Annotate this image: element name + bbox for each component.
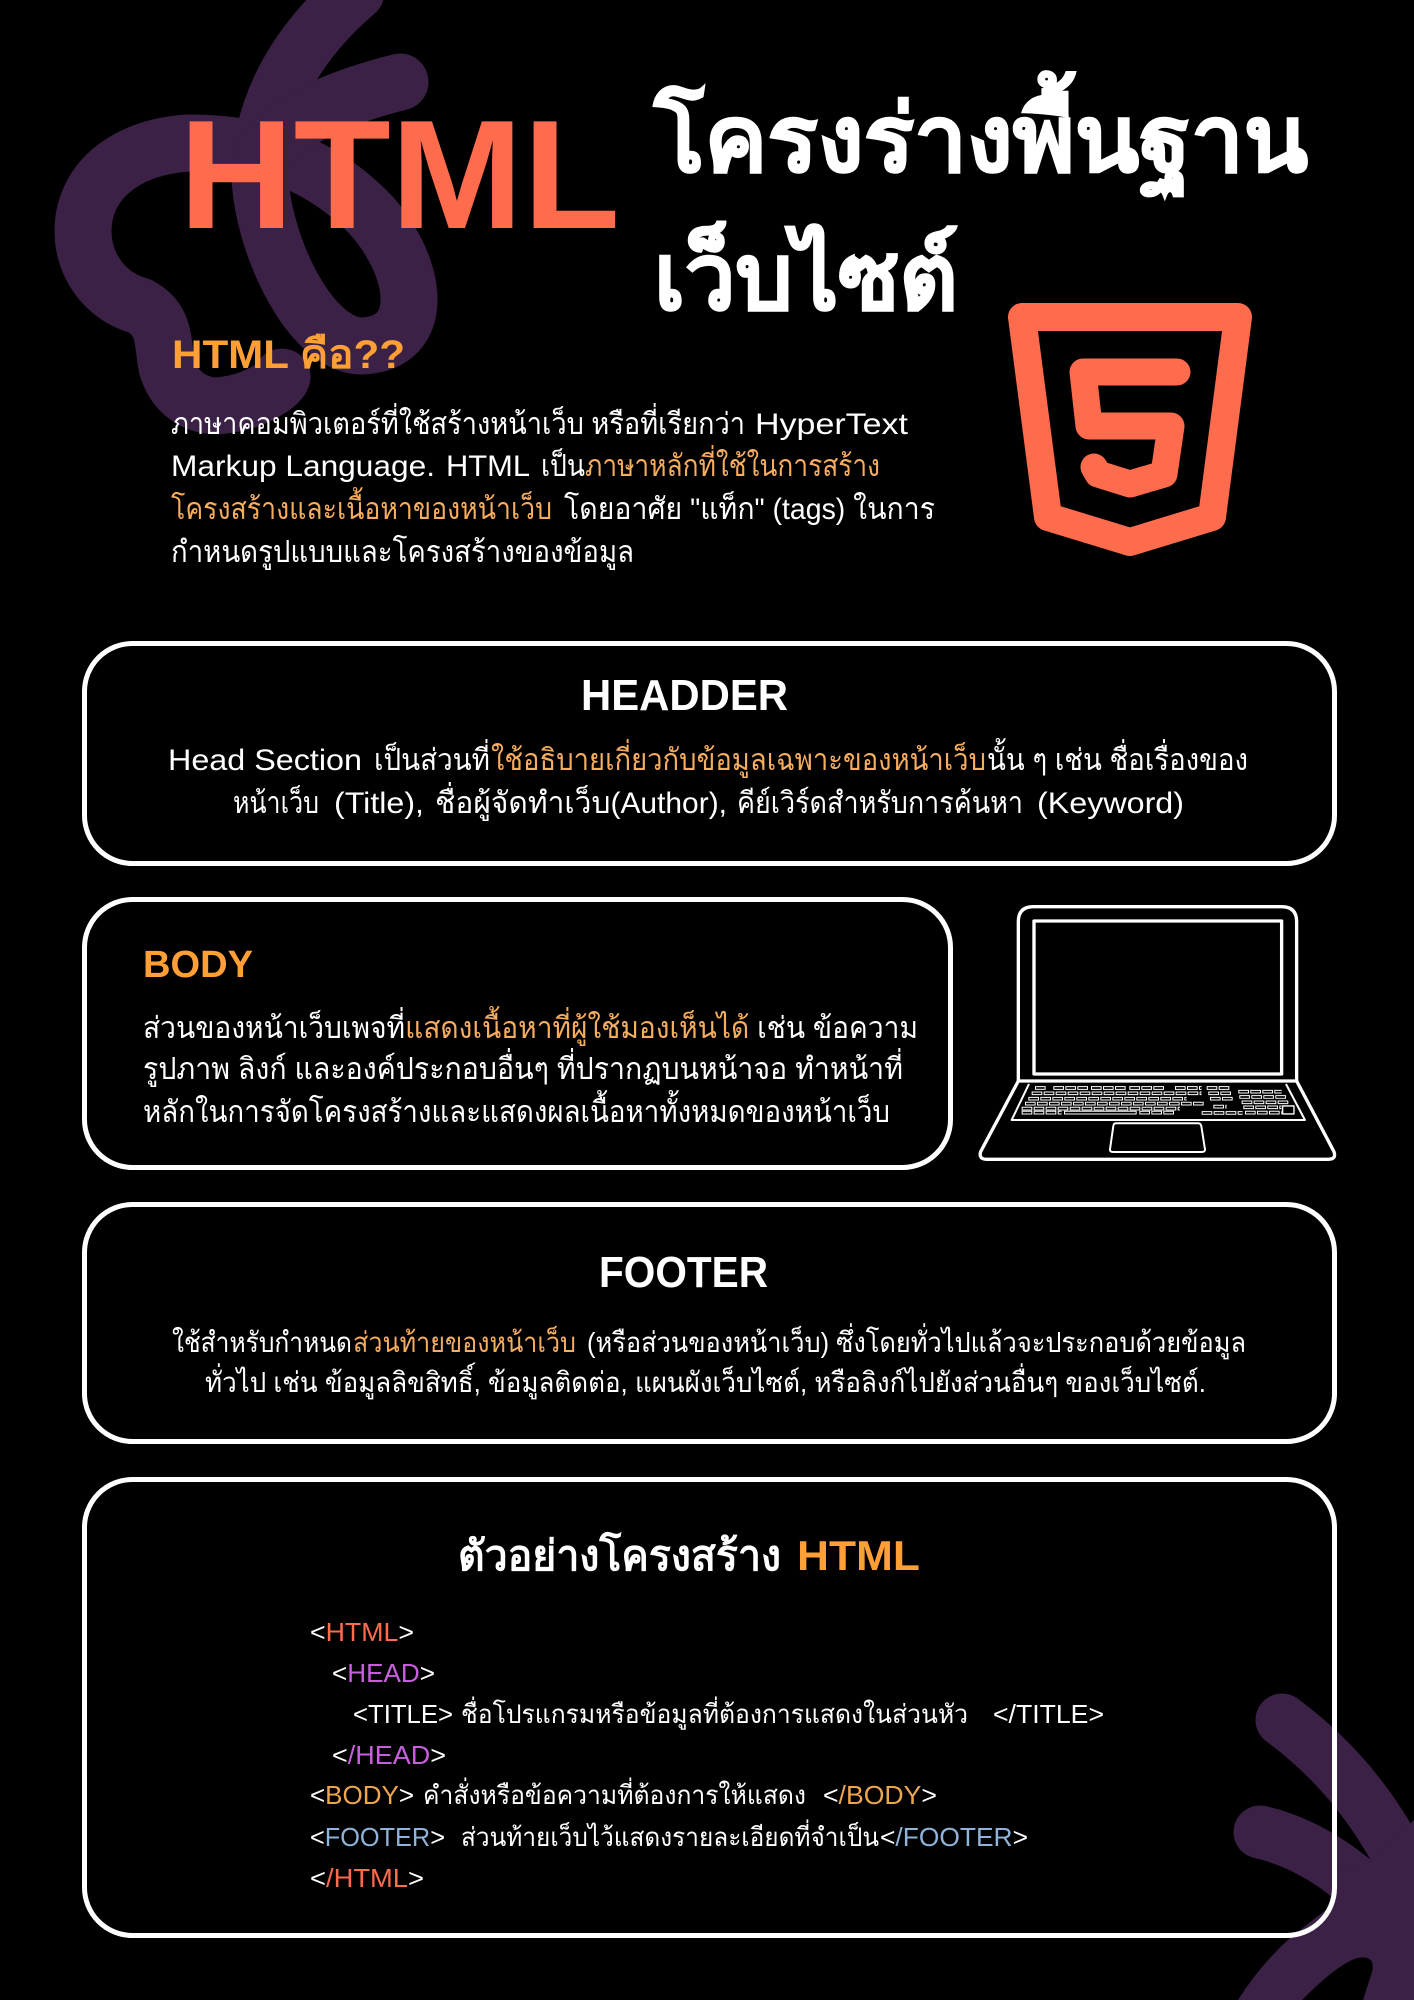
intro paragraph: กำหนดรูปแบบและโครงสร้างของข้อมูล <box>171 534 634 570</box>
header description: คีย์เวิร์ดสำหรับการค้นหา <box>737 786 1023 820</box>
header description: Head Section <box>168 744 362 777</box>
code sample: <BODY> <box>310 1780 414 1810</box>
body description: ส่วนของหน้าเว็บเพจที่แสดงเนื้อหาที่ผู้ใช้มองเห็นได้ เช่น ข้อความ <box>143 1006 918 1046</box>
icon: laptop <box>980 907 1335 1159</box>
decorative squiggle: top left <box>83 0 409 406</box>
code sample: </HTML> <box>310 1863 424 1893</box>
code sample: คำสั่งหรือข้อความที่ต้องการให้แสดง <box>423 1777 806 1810</box>
panel: HTML structure example <box>84 1480 1334 1936</box>
heading: HEADDER: HEADDER <box>581 671 788 720</box>
heading: BODY: BODY <box>143 944 253 986</box>
intro paragraph: ภาษาหลักที่ใช้ในการสร้าง <box>585 445 880 483</box>
footer description: ใช้สำหรับกำหนด <box>172 1326 352 1358</box>
heading: FOOTER: FOOTER <box>599 1248 768 1297</box>
code sample: </BODY> <box>823 1780 937 1810</box>
footer description <box>172 1323 1246 1400</box>
intro paragraph: HyperText <box>755 408 909 441</box>
header description: (Title), <box>334 787 424 820</box>
code sample: <HTML> <box>310 1617 414 1647</box>
code sample: </TITLE> <box>993 1699 1104 1729</box>
body description: รูปภาพ ลิงก์ และองค์ประกอบอื่นๆ ที่ปรากฏบนหน้าจอ ทำหน้าที่ <box>143 1048 903 1087</box>
intro paragraph: เป็น <box>541 447 585 483</box>
header description: ใช้อธิบายเกี่ยวกับข้อมูลเฉพาะของหน้าเว็บ <box>491 739 986 778</box>
title: Thai heading <box>653 71 1308 329</box>
header description: เป็นส่วนที่ <box>374 739 490 777</box>
header description: (Keyword) <box>1037 787 1184 820</box>
title: Thai heading: โครงร่างพื้นฐาน <box>653 71 1308 201</box>
panel: body <box>84 900 950 1168</box>
title: Thai heading: เว็บไซต์ <box>654 220 958 329</box>
intro paragraph: HTML <box>446 450 530 483</box>
header description: ชื่อผู้จัดทำเว็บ(Author), <box>435 782 727 821</box>
footer description: (หรือส่วนของหน้าเว็บ) ซึ่งโดยทั่วไปแล้วจะประกอบด้วยข้อมูล <box>587 1323 1246 1360</box>
intro paragraph <box>171 403 935 570</box>
body description <box>143 1006 918 1129</box>
icon: HTML5 shield <box>1022 317 1238 542</box>
intro paragraph: โดยอาศัย "แท็ก" (tags) ในการ <box>564 490 935 526</box>
laptop keys <box>1022 1088 1294 1114</box>
code sample <box>310 1617 1104 1893</box>
intro paragraph: Markup Language. <box>171 450 435 483</box>
heading: code example: ตัวอย่างโครงสร้าง <box>458 1531 781 1579</box>
code sample: <HEAD> <box>332 1658 435 1688</box>
code sample: <TITLE> <box>353 1699 453 1729</box>
footer description: ส่วนท้ายของหน้าเว็บ <box>353 1325 576 1358</box>
body description: หลักในการจัดโครงสร้างและแสดงผลเนื้อหาทั้งหมดของหน้าเว็บ <box>143 1090 890 1129</box>
subheading: HTML คือ??: HTML คือ?? <box>172 333 405 377</box>
header description <box>168 738 1248 821</box>
code sample: ชื่อโปรแกรมหรือข้อมูลที่ต้องการแสดงในส่วนหัว <box>461 1696 968 1730</box>
panel: footer <box>84 1204 1334 1442</box>
title: HTML: HTML <box>179 88 620 261</box>
panel: header <box>84 644 1334 864</box>
footer description: ทั่วไป เช่น ข้อมูลลิขสิทธิ์, ข้อมูลติดต่อ, แผนผังเว็บไซต์, หรือลิงก์ไปยังส่วนอื่นๆ ของเว็บไซต์. <box>205 1362 1206 1400</box>
decorative squiggle: bottom right <box>1238 1720 1414 2000</box>
heading: code example: HTML <box>797 1532 920 1579</box>
code sample: </FOOTER> <box>880 1822 1028 1852</box>
header description: นั้น ๆ เช่น ชื่อเรื่องของ <box>987 738 1248 777</box>
code sample: </HEAD> <box>332 1740 446 1770</box>
header description: หน้าเว็บ <box>233 784 319 820</box>
intro paragraph: ภาษาคอมพิวเตอร์ที่ใช้สร้างหน้าเว็บ หรือที่เรียกว่า <box>171 403 745 441</box>
intro paragraph: โครงสร้างและเนื้อหาของหน้าเว็บ <box>171 487 552 526</box>
code sample: <FOOTER> <box>310 1822 445 1852</box>
code sample: ส่วนท้ายเว็บไว้แสดงรายละเอียดที่จำเป็น <box>461 1819 879 1852</box>
